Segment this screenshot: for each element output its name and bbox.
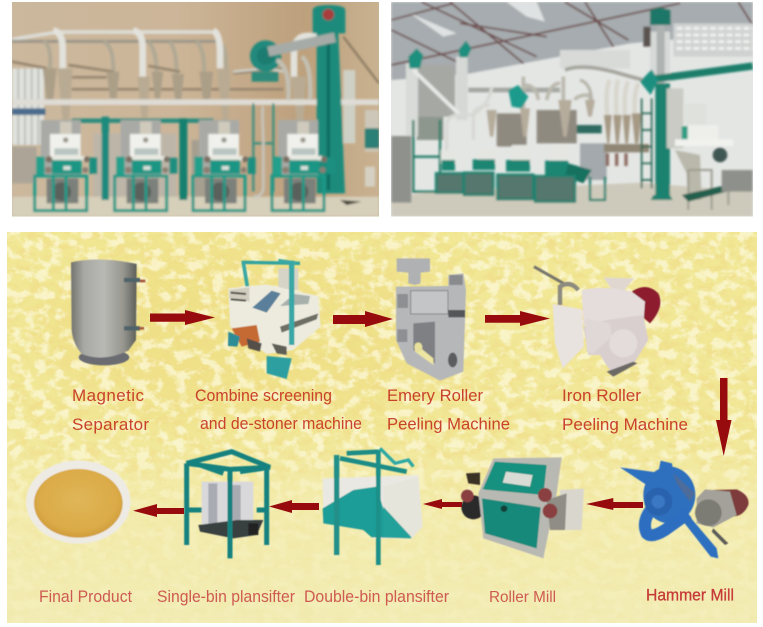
- silver hopper: [417, 65, 455, 117]
- label: single-bin plansifter: Single-bin plansifter: [157, 587, 295, 606]
- photo: complete mill line in white hall: [379, 0, 763, 222]
- pale filter column: [667, 88, 683, 148]
- main cyclones: [57, 68, 306, 123]
- panel background: [7, 232, 757, 623]
- duct work: [468, 83, 560, 97]
- green frame: [413, 120, 440, 192]
- label: hammer mill: Hammer Mill: [646, 586, 734, 604]
- label: iron peeling machine: Peeling Machine: [562, 415, 688, 434]
- grey cabinet: [391, 136, 411, 203]
- labels: [72, 386, 688, 434]
- panel: flour process flow: [7, 232, 757, 623]
- arrow: double-bin to single-bin: [269, 500, 319, 513]
- secondary cyclones: [43, 68, 213, 100]
- left window: [12, 68, 44, 145]
- ladder: [642, 98, 652, 188]
- final product bowl: [26, 460, 131, 544]
- label: and de-stoner machine: and de-stoner machine: [200, 414, 362, 433]
- machine: single-bin plansifter: [187, 452, 270, 558]
- blue valves: [12, 108, 45, 115]
- cyclones: [487, 100, 595, 137]
- ceiling duct run: [12, 32, 213, 39]
- arrow: separator to screening: [150, 310, 215, 325]
- machine: hammer mill: [620, 461, 749, 558]
- machine: magnetic separator: [71, 260, 145, 365]
- arrow: roller mill to double-bin: [423, 499, 462, 509]
- photo: four roller mills in tan workshop: [0, 0, 391, 222]
- floor: [12, 197, 379, 217]
- label: emery peeling machine: Peeling Machine: [387, 414, 510, 434]
- teal rear structure: [72, 114, 213, 127]
- right chute: [343, 37, 379, 83]
- left elevators: [406, 63, 418, 137]
- green beam: [647, 66, 753, 80]
- label: separator: Separator: [72, 415, 149, 434]
- label: final product: Final Product: [39, 587, 132, 606]
- machine: roller mill: [461, 457, 584, 558]
- arrow: hammer mill to roller mill: [586, 498, 643, 510]
- rear cluster: [497, 110, 577, 147]
- secondary arcs: [43, 42, 226, 100]
- roof: [391, 2, 753, 80]
- white gantry band: [12, 99, 379, 105]
- label: double-bin plansifter: Double-bin plansifter: [304, 587, 449, 606]
- main risers: [53, 31, 337, 80]
- teal fan: [508, 85, 528, 108]
- floor: [391, 183, 753, 217]
- mill units: [441, 145, 572, 163]
- fan duct: [268, 37, 335, 52]
- roof trusses: [391, 2, 753, 65]
- label: iron roller: Iron Roller: [562, 386, 641, 405]
- right window: [343, 70, 355, 143]
- machine: combine screening and de-stoner: [228, 261, 321, 379]
- packing machine: [682, 125, 718, 140]
- tall elevator: [650, 32, 670, 82]
- arrow: iron roller down to hammer mill: [716, 378, 732, 456]
- sifter cyclones: [607, 80, 638, 117]
- label: roller mill: Roller Mill: [489, 589, 556, 606]
- label: emery roller: Emery Roller: [387, 386, 483, 405]
- label: magnetic: Magnetic: [72, 386, 144, 405]
- machine: iron roller peeling: [534, 267, 660, 377]
- arrow: screening to emery: [333, 311, 393, 327]
- bucket elevator: [313, 5, 345, 193]
- arrow: emery to iron roller: [485, 311, 550, 326]
- arrow: single-bin to final product: [133, 504, 184, 517]
- label: combine screening: Combine screening: [195, 386, 332, 405]
- mills: [35, 120, 97, 211]
- wall vent grid: [673, 23, 753, 57]
- machine: emery roller peeling: [396, 258, 466, 381]
- fan: [250, 40, 281, 72]
- machine: double-bin plansifter: [323, 448, 423, 565]
